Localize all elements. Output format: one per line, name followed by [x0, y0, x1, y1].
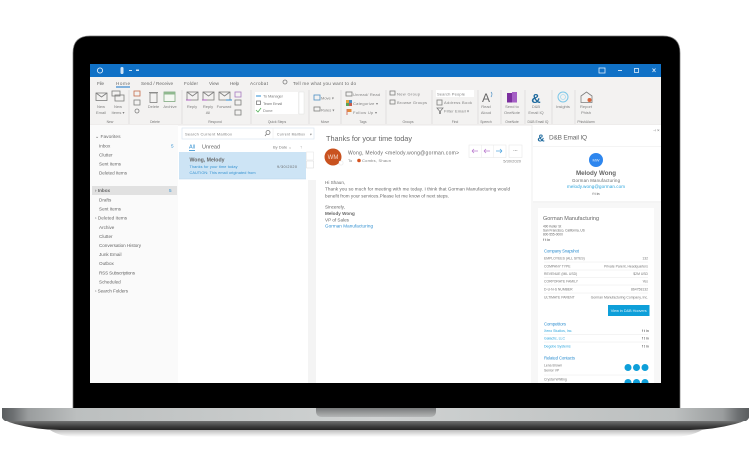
ribbon group: speech: Read [481, 104, 491, 109]
reading pane: Hi Shaun, [325, 180, 345, 185]
ribbon background and tabs: Acrobat [250, 81, 269, 86]
company snapshot table: D-U-N-S NUMBER [544, 288, 573, 292]
contact card: melody.wong@gorman.com [567, 184, 625, 189]
sender avatar: WM [328, 155, 338, 161]
ribbon group: respond: Forward [217, 104, 231, 109]
view in d&b hoovers button [608, 305, 650, 316]
message list pane: Current Mailbox [277, 132, 305, 136]
ribbon group: tags: Unread/ Read [353, 92, 380, 97]
ribbon group: new: New [97, 104, 105, 109]
company snapshot table: EMPLOYEES (ALL SITES) [544, 256, 585, 260]
ribbon background and tabs: View [209, 81, 220, 86]
reading pane: Wong, Melody <melody.wong@gorman.com> [348, 150, 459, 156]
ribbon group: respond: Reply [203, 104, 213, 109]
company snapshot table: Gorman Manufacturing Company, Inc. [591, 296, 648, 300]
reading pane: Thanks for your time today [326, 134, 412, 143]
company card: San Francisco, California, US [543, 228, 585, 232]
reading pane: Sincerely, [325, 204, 345, 210]
company snapshot table: 132 [642, 256, 648, 260]
company card: Company Snapshot [544, 248, 580, 254]
ribbon group: new: Email [96, 110, 106, 115]
ribbon group: find: Find [452, 120, 458, 124]
ribbon group: phishalarm: Phish [581, 110, 591, 115]
contact card [533, 153, 661, 202]
ribbon group: move: Move [321, 120, 329, 124]
ribbon group: speech: Aloud [481, 110, 491, 115]
ribbon group: phishalarm [577, 92, 595, 124]
folder pane: 5 [171, 144, 174, 148]
ribbon group: d&b email iq [528, 94, 548, 124]
ribbon group: delete: Delete [150, 120, 160, 124]
ribbon group: speech: A [482, 91, 490, 105]
reading pane: Combs, Shaun [362, 158, 391, 163]
reply action buttons [469, 145, 522, 158]
company snapshot table: REVENUE (MIL USD) [544, 272, 577, 276]
ribbon group: find: Filter Email ▾ [444, 108, 469, 114]
message list pane [179, 128, 314, 179]
message list pane: Wong, Melody [190, 158, 225, 164]
contact card: Gorman Manufacturing [572, 178, 621, 183]
folder pane: Conversation History [99, 243, 142, 248]
folder pane: Sent Items [99, 206, 122, 212]
ribbon group: quick steps: Done [263, 108, 273, 113]
reading pane: Melody Wong [325, 211, 355, 216]
ribbon group: new: New [107, 120, 114, 124]
folder pane: Junk Email [99, 252, 121, 257]
folder pane [90, 125, 178, 292]
folder pane: Outbox [99, 261, 115, 266]
ribbon group: move: Move ▾ [321, 96, 334, 100]
related contacts list [544, 356, 648, 383]
folder pane: Inbox [99, 144, 111, 148]
competitors list: Degobe Systems [544, 344, 571, 348]
ribbon background and tabs: Folder [184, 81, 198, 86]
message list pane: ▾ [310, 132, 312, 136]
ribbon group: tags: Tags [359, 120, 367, 124]
contact card: Melody Wong [576, 170, 616, 177]
ribbon background and tabs: Send / Receive [141, 81, 173, 86]
reading pane: benefit from your services.Please let me know of next steps. [325, 194, 449, 198]
panel header: & [537, 134, 545, 144]
folder pane: RSS Subscriptions [99, 270, 136, 276]
reading pane: Gorman Manufacturing [325, 224, 373, 228]
folder pane: › Search Folders [95, 289, 129, 294]
message list pane: All [189, 144, 195, 150]
folder pane: 5 [169, 188, 172, 193]
ribbon group: delete [134, 91, 177, 124]
ribbon group: quick steps [255, 92, 304, 124]
competitors list: f t in [642, 336, 649, 340]
folder pane: Archive [99, 225, 115, 230]
company snapshot table: ULTIMATE PARENT [544, 296, 575, 300]
ribbon group: quick steps: Team Email [263, 101, 282, 106]
company card: f t in [543, 238, 550, 242]
message list pane: 9/30/2020 [277, 165, 297, 169]
competitors list: f t in [642, 344, 649, 348]
ribbon background and tabs: Tell me what you want to do [293, 81, 356, 86]
ribbon background and tabs: Help [230, 81, 239, 86]
d&b email iq side panel [532, 125, 661, 386]
competitors list: f t in [642, 329, 649, 333]
ribbon group: speech: Speech [480, 120, 492, 124]
ribbon group: groups: New Group [397, 92, 421, 96]
message list pane: Unread [202, 144, 220, 150]
reading pane [324, 134, 522, 228]
ribbon group: find [436, 90, 474, 124]
competitors list: Galactic, LLC [544, 336, 565, 340]
title bar [90, 64, 661, 77]
ribbon group: speech [480, 91, 492, 124]
contact card: MW [592, 158, 600, 162]
reply action buttons: ··· [513, 148, 518, 153]
folder pane: Scheduled [99, 280, 121, 284]
ribbon group: tags [346, 92, 380, 124]
message list pane: By Date ⌄ [273, 144, 292, 150]
message list pane: Search Current Mailbox [185, 132, 232, 136]
ribbon background and tabs: Home [116, 81, 130, 86]
company card: 800-555-0000 [543, 232, 563, 236]
ribbon group: onenote: Send to [505, 104, 520, 109]
ribbon group: respond: All [206, 110, 210, 115]
panel header [533, 128, 661, 146]
related contacts list: Lena Brown [544, 364, 562, 368]
ribbon group: onenote: OneNote [505, 120, 519, 124]
laptop lid [73, 36, 680, 409]
ribbon group: phishalarm: Report [580, 104, 593, 109]
company card: 490 Keller St [543, 224, 561, 228]
company snapshot table: CORPORATE FAMILY [544, 280, 579, 284]
ribbon group: groups [390, 91, 427, 124]
company snapshot table: Private Parent, Headquarters [604, 264, 648, 268]
ribbon group: insights [556, 92, 570, 109]
folder pane: Drafts [99, 198, 112, 202]
ribbon group: delete: Archive [163, 104, 177, 109]
ribbon background and tabs: File [97, 81, 104, 86]
ribbon group: tags: Follow Up ▾ [353, 110, 377, 115]
message list pane: Thanks for your time today [190, 165, 238, 169]
related contacts list: Senior VP [544, 368, 560, 372]
reading pane: VP of Sales [325, 218, 350, 222]
ribbon group: delete: Delete [148, 104, 160, 109]
related contacts list: Related Contacts [544, 356, 575, 360]
folder pane: Clutter [99, 234, 113, 239]
ribbon group: respond: Reply [187, 104, 197, 109]
reading pane: Thank you so much for meeting with me today. I think that Gorman Manufacturing would [325, 186, 510, 192]
ribbon group: onenote: OneNote [504, 110, 521, 115]
contact card: f t in [592, 192, 600, 196]
ribbon group: phishalarm: PhishAlarm [577, 120, 595, 124]
ribbon group: respond [186, 92, 241, 124]
panel header: ⊣ ✕ [653, 128, 660, 132]
message list pane: ↑ [300, 144, 302, 150]
company card: Gorman Manufacturing [543, 216, 599, 222]
ribbon group: quick steps: Quick Steps [268, 120, 286, 124]
laptop base [2, 408, 749, 437]
ribbon group: find: Search People [437, 92, 466, 96]
sender avatar [324, 148, 343, 166]
ribbon group: move [314, 95, 334, 124]
ribbon group: new: New [114, 104, 122, 109]
ribbon group: new: Items ▾ [112, 110, 124, 115]
company snapshot table: Yes [642, 280, 648, 284]
ribbon group: d&b email iq: D&B [532, 104, 540, 109]
view in d&b hoovers button: View in D&B Hoovers [611, 308, 647, 313]
outlook screen [90, 64, 661, 386]
company snapshot table [544, 256, 649, 300]
company snapshot table: 864758132 [631, 288, 648, 292]
ribbon group: move: Rules ▾ [321, 108, 334, 112]
folder pane: › Inbox [95, 188, 111, 193]
competitors list: Competitors [544, 322, 566, 326]
ribbon group: insights: Insights [556, 104, 570, 109]
ribbon background and tabs [90, 77, 661, 125]
ribbon group: groups: Browse Groups [397, 100, 427, 105]
ribbon group: respond: Respond [208, 120, 222, 124]
ribbon group: d&b email iq: D&B Email IQ [528, 120, 549, 124]
panel header: D&B Email IQ [549, 134, 587, 142]
ribbon group: groups: Groups [402, 120, 414, 124]
folder pane: Deleted Items [99, 170, 128, 176]
ribbon group: new [96, 91, 124, 124]
company snapshot table: $2M USD [633, 272, 649, 276]
folder pane: › Deleted Items [95, 216, 128, 221]
related contacts list: Crystal Whiting [544, 378, 567, 382]
ribbon group: tags: Categorize ▾ [353, 101, 378, 106]
folder pane: Sent Items [99, 162, 122, 166]
folder pane: ⌄ Favorites [95, 134, 121, 140]
ribbon group: d&b email iq: & [531, 91, 541, 106]
ribbon group: quick steps: To Manager [263, 94, 284, 98]
message list pane: CAUTION: This email originated from [190, 171, 256, 175]
company snapshot table: COMPANY TYPE [544, 264, 571, 268]
folder pane: Clutter [99, 152, 113, 158]
ribbon group: onenote [504, 92, 521, 124]
reading pane: To [348, 158, 353, 163]
ribbon group: find: Address Book [444, 100, 472, 105]
company card [543, 216, 650, 383]
reading pane: 5/30/2020 [503, 158, 522, 164]
ribbon group: d&b email iq: Email IQ [528, 110, 544, 115]
competitors list [544, 322, 649, 348]
competitors list: Xeno Studios, Inc. [544, 329, 572, 333]
pane divider strip [308, 180, 316, 383]
